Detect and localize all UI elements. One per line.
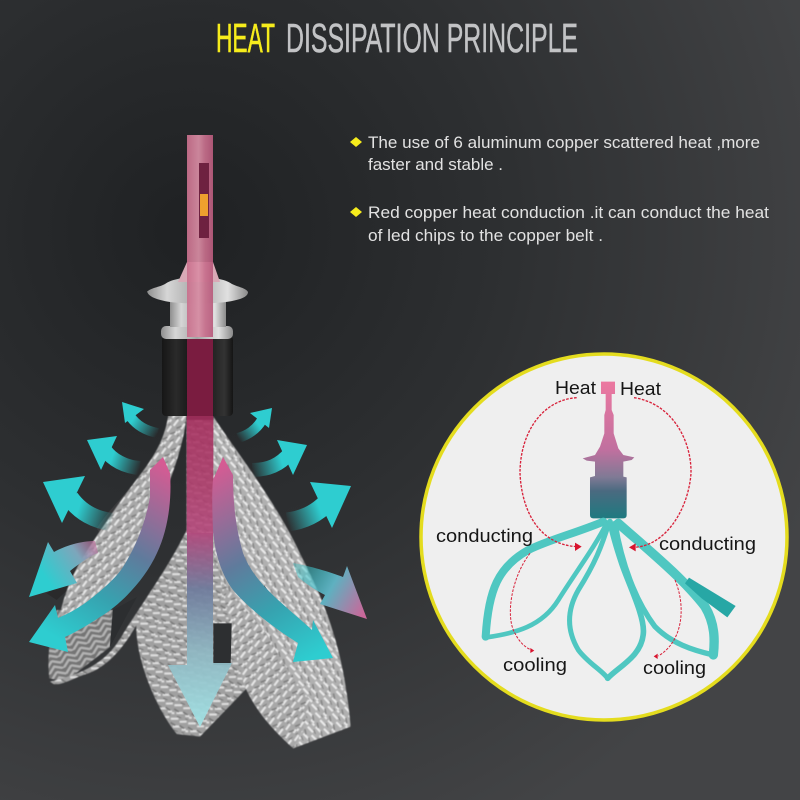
arrow: left heat flow [29, 457, 170, 652]
inset labels: cooling [643, 658, 706, 678]
bullet: aluminum copper note: faster and stable . [368, 156, 503, 174]
arrow: upper left 3 [43, 476, 112, 523]
strap connector [685, 578, 736, 617]
bullet: red copper note: Red copper heat conduction .it can conduct the heat [368, 204, 769, 222]
inset labels: cooling [503, 655, 567, 675]
central arrow [168, 533, 232, 727]
title [216, 15, 578, 61]
arrow: right heat flow [212, 457, 333, 662]
bulb collar cone [178, 262, 220, 282]
inset circle panel [421, 354, 787, 720]
title: DISSIPATION PRINCIPLE [286, 15, 578, 61]
text block: heat dissipation notes [350, 134, 769, 245]
arrow: upper right 3 [287, 482, 351, 528]
bullet: red copper note: of led chips to the copper belt . [368, 227, 603, 245]
bulb silver ring [161, 326, 233, 339]
arrow: upper left 2 [87, 436, 140, 470]
bullet: aluminum copper note: The use of 6 aluminum copper scattered heat ,more [368, 134, 760, 152]
teal copper strap loops [486, 522, 714, 678]
inset labels [436, 378, 756, 678]
red arrowheads [530, 543, 658, 659]
bullet: aluminum copper note [350, 134, 760, 174]
bulb silver neck [170, 298, 226, 327]
bullet: red copper note [350, 204, 769, 245]
amber LED chip [200, 194, 208, 216]
bulb flange [147, 277, 248, 304]
braided strap surfaces [48, 415, 351, 748]
red band through base [187, 339, 213, 416]
arrow: upper left 1 [122, 402, 158, 433]
copper braid straps [47, 415, 351, 748]
LED window [199, 163, 209, 238]
bulb black base [162, 336, 233, 416]
inset labels: Heat [620, 379, 661, 399]
inset diagram [486, 382, 736, 678]
mini bulb [583, 382, 634, 518]
title: HEAT [216, 15, 275, 61]
arrow: mid right [293, 563, 367, 619]
arrow: mid left [29, 541, 98, 597]
LED bulb [147, 135, 248, 416]
arrow: upper right 2 [252, 440, 307, 475]
inset labels: Heat [555, 378, 596, 398]
red dashed heat paths [510, 398, 691, 656]
bulb shaft pink [187, 135, 213, 337]
arrow: upper right 1 [238, 408, 272, 438]
inset labels: conducting [659, 534, 756, 554]
inset labels: conducting [436, 526, 533, 546]
